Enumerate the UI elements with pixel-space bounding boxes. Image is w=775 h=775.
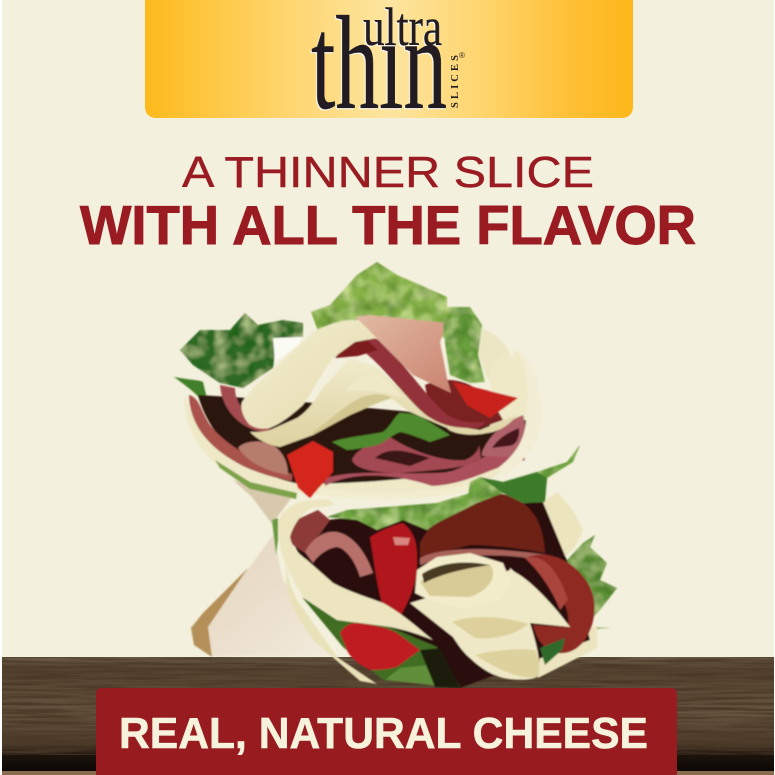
salami rim bbox=[420, 549, 548, 565]
fold shade bbox=[452, 617, 528, 638]
middle lettuce bbox=[332, 413, 450, 450]
front lettuce bbox=[327, 445, 580, 530]
logo banner bbox=[145, 0, 633, 137]
left inner meat bbox=[220, 385, 272, 432]
right cream rim bbox=[538, 625, 597, 678]
inner cheese fold bbox=[250, 358, 517, 447]
red callout panel bbox=[96, 688, 677, 775]
outer cheese fold bbox=[241, 320, 383, 429]
dark salami bbox=[420, 493, 545, 557]
top red pepper bbox=[453, 382, 518, 418]
green pesto bbox=[302, 597, 460, 687]
callout text: REAL, NATURAL CHEESE bbox=[119, 709, 648, 758]
rear cheese roll bbox=[477, 327, 510, 388]
small cheese roll bbox=[415, 553, 511, 608]
dark interior bbox=[285, 495, 590, 688]
green strip bbox=[215, 460, 297, 499]
inner cheese shade bbox=[313, 394, 392, 435]
small green leaf bbox=[540, 638, 565, 665]
dark lettuce tip bbox=[480, 472, 547, 503]
dark line under meat bbox=[378, 360, 445, 420]
outer cream crescent bbox=[184, 350, 541, 497]
dark bottom core bbox=[420, 648, 460, 688]
red pepper upper bbox=[370, 523, 417, 617]
bottom cheese lip bbox=[318, 484, 470, 499]
lower salami band bbox=[325, 445, 525, 486]
small left lettuce bbox=[174, 377, 235, 440]
left meat roll bbox=[288, 510, 330, 553]
pale meat bbox=[238, 442, 288, 475]
right salami fold bbox=[482, 415, 525, 457]
lower cheese fold shading bbox=[475, 649, 539, 678]
callout banner bbox=[96, 688, 677, 775]
headline line 2: WITH ALL THE FLAVOR bbox=[80, 194, 696, 256]
dark meat behind pepper bbox=[425, 380, 503, 432]
gold banner panel bbox=[145, 0, 633, 118]
headline bbox=[80, 148, 696, 256]
front red pepper bbox=[287, 441, 333, 498]
logo wordmark bbox=[311, 0, 447, 137]
dark lettuce left bbox=[180, 313, 303, 388]
tortilla body bbox=[190, 535, 333, 656]
prosciutto bbox=[355, 315, 451, 393]
headline line 1: A THINNER SLICE bbox=[182, 148, 594, 197]
right lettuce bbox=[560, 535, 617, 630]
right outer cheese bbox=[498, 348, 541, 475]
middle cheese fold bbox=[450, 568, 570, 638]
red meat band bbox=[350, 337, 485, 428]
green lining bbox=[272, 518, 278, 555]
white leaf rib bbox=[273, 337, 303, 362]
tortilla neck bbox=[233, 480, 292, 524]
cream panel right bbox=[490, 352, 527, 428]
left cheese wrap bbox=[278, 500, 433, 640]
bottom wrap bbox=[190, 445, 617, 688]
front lettuce piece bbox=[443, 307, 485, 383]
inner cheese highlight bbox=[345, 375, 403, 398]
sandwich wraps photo illustration bbox=[174, 262, 617, 688]
right salami bbox=[525, 555, 594, 653]
red pepper lower bbox=[340, 623, 420, 670]
center salami fold bbox=[352, 437, 481, 473]
dark red under prosciutto bbox=[335, 338, 378, 358]
large cheese fold bbox=[410, 570, 570, 680]
logo slices tag: SLICES bbox=[450, 55, 461, 108]
cheese strip left bbox=[285, 562, 377, 684]
left meat band bbox=[189, 395, 292, 481]
top lettuce bbox=[311, 262, 482, 345]
registered mark: ® bbox=[459, 51, 465, 60]
wood table bbox=[2, 657, 774, 775]
rear cheese bbox=[533, 492, 583, 562]
dark interior bbox=[198, 395, 528, 484]
top wrap bbox=[174, 262, 541, 524]
tortilla brown edge bbox=[191, 568, 248, 657]
pepper gloss bbox=[393, 537, 410, 545]
